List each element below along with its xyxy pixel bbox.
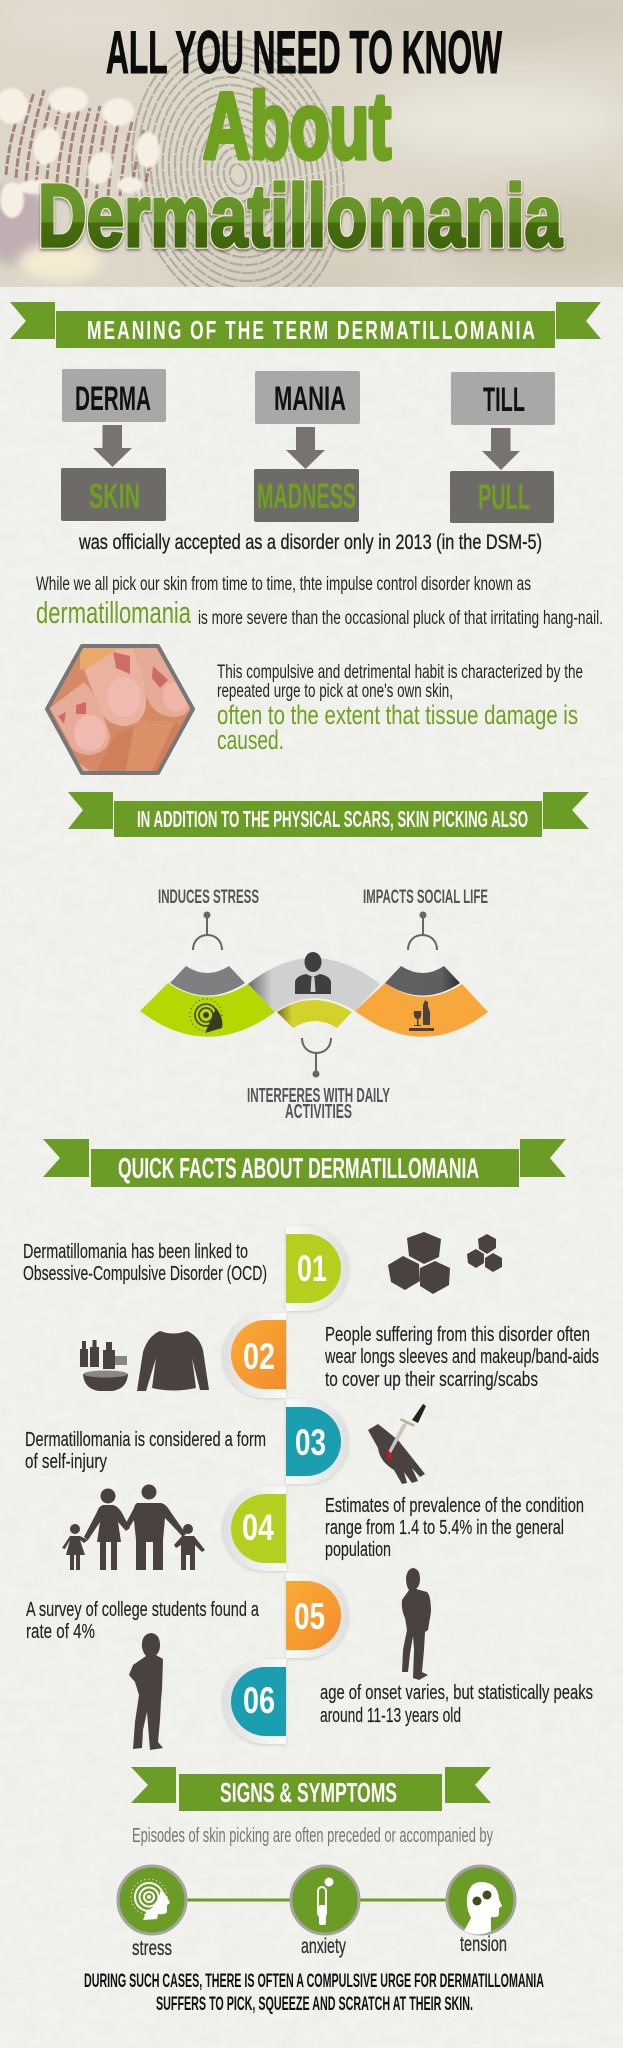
icon: tension bbox=[447, 1866, 515, 1934]
text 03 bbox=[25, 1429, 266, 1473]
arrow: till bbox=[482, 428, 520, 470]
box: madness bbox=[254, 469, 359, 522]
box: skin bbox=[61, 468, 166, 521]
label: interferes with daily activities: INTERFERES WITH DAILY bbox=[247, 1085, 390, 1107]
icon: hexagon scabs bbox=[388, 1232, 502, 1294]
fact 01 bbox=[23, 1226, 502, 1311]
segment: centre yellow bbox=[277, 1000, 352, 1028]
text: habit description: caused. bbox=[217, 725, 284, 755]
term: mania to madness bbox=[254, 371, 360, 522]
icon: standing student bbox=[402, 1568, 431, 1680]
fact 04 bbox=[62, 1484, 584, 1571]
box: pull bbox=[450, 471, 554, 523]
badge 05: 05 bbox=[294, 1596, 325, 1637]
badge 03: 03 bbox=[295, 1422, 326, 1463]
icon: family bbox=[62, 1484, 205, 1570]
banner: quick facts bbox=[43, 1139, 566, 1187]
text 06 bbox=[320, 1682, 593, 1727]
text 02: to cover up their scarring/scabs bbox=[325, 1369, 538, 1391]
label: stress: stress bbox=[132, 1937, 172, 1960]
badge 06 bbox=[223, 1659, 286, 1744]
box: pull: PULL bbox=[478, 478, 530, 517]
icon: long-sleeved sweater bbox=[137, 1331, 209, 1391]
connector: social bbox=[408, 912, 437, 950]
connector: daily activities bbox=[302, 1038, 331, 1076]
text 03: of self-injury bbox=[25, 1451, 107, 1473]
box: derma: DERMA bbox=[75, 380, 151, 418]
box: madness: MADNESS bbox=[257, 477, 356, 516]
badge 04 bbox=[223, 1486, 286, 1571]
text 02 bbox=[324, 1324, 599, 1391]
badge 04: 04 bbox=[242, 1507, 274, 1548]
icon: anxiety bbox=[291, 1866, 359, 1934]
badge 06: 06 bbox=[243, 1680, 275, 1721]
icon: stress head bbox=[190, 999, 222, 1033]
title line 2: About bbox=[203, 73, 391, 178]
header panel bbox=[0, 0, 623, 287]
right finger bbox=[135, 646, 190, 717]
text 03: Dermatillomania is considered a form bbox=[25, 1429, 266, 1451]
badge 02 bbox=[223, 1313, 286, 1398]
text: habit description bbox=[217, 662, 583, 755]
icon: bottle and glass bbox=[409, 999, 434, 1031]
symptoms row bbox=[118, 1866, 515, 1960]
segment: lime bbox=[140, 983, 275, 1037]
banner: physical scars bbox=[68, 792, 589, 837]
text 04: population bbox=[325, 1539, 391, 1561]
box: derma bbox=[62, 369, 166, 422]
text 05: rate of 4% bbox=[26, 1621, 95, 1643]
left finger bbox=[50, 682, 110, 755]
icon: stress bbox=[118, 1866, 186, 1934]
badge 01 bbox=[286, 1226, 349, 1311]
text 04 bbox=[325, 1495, 584, 1561]
badge 05 bbox=[286, 1573, 349, 1658]
label: tension: tension bbox=[460, 1933, 507, 1956]
text 01: Dermatillomania has been linked to bbox=[23, 1241, 248, 1263]
icon: knife and bleeding hand bbox=[368, 1404, 426, 1484]
term: till to pull bbox=[450, 372, 555, 523]
text: intro paragraph: dermatillomania bbox=[36, 595, 192, 630]
label: impacts social life: IMPACTS SOCIAL LIFE bbox=[363, 887, 488, 908]
label: interferes with daily activities: ACTIVITIES bbox=[285, 1101, 352, 1123]
text 05: A survey of college students found a bbox=[26, 1599, 260, 1621]
fact 02 bbox=[80, 1313, 599, 1398]
text 01 bbox=[23, 1241, 267, 1285]
text 01: Obsessive-Compulsive Disorder (OCD) bbox=[23, 1263, 267, 1285]
box: mania bbox=[255, 371, 360, 424]
text 05 bbox=[26, 1599, 260, 1643]
fact 06 bbox=[129, 1633, 593, 1750]
banner: meaning of the term bbox=[10, 302, 601, 348]
arrow: mania bbox=[286, 427, 325, 469]
segment: centre grey bbox=[248, 958, 380, 1012]
banner: signs and symptoms bbox=[131, 1767, 491, 1811]
banner: signs and symptoms: SIGNS & SYMPTOMS bbox=[220, 1777, 397, 1808]
fact 05 bbox=[26, 1568, 431, 1680]
middle finger bbox=[84, 649, 146, 726]
text: intro paragraph bbox=[36, 574, 603, 630]
box: till: TILL bbox=[483, 381, 525, 419]
term: derma to skin bbox=[61, 369, 166, 521]
box: mania: MANIA bbox=[274, 380, 346, 418]
badge 03 bbox=[286, 1399, 349, 1484]
segment: orange bbox=[355, 983, 488, 1037]
arrow: derma bbox=[93, 425, 132, 467]
box: skin: SKIN bbox=[89, 477, 140, 516]
text: closing statement bbox=[84, 1971, 544, 2015]
text: habit description: repeated urge to pick at one's own skin, bbox=[217, 681, 453, 702]
header background with fingerprint bbox=[0, 0, 623, 287]
icon: standing person bbox=[129, 1633, 163, 1750]
connector line bbox=[187, 1898, 481, 1902]
connector: stress bbox=[193, 912, 222, 950]
icon: makeup bbox=[80, 1340, 128, 1391]
badge 02: 02 bbox=[243, 1336, 275, 1377]
text 06: around 11-13 years old bbox=[320, 1705, 461, 1727]
icon: businessman bbox=[295, 952, 331, 994]
segment: right dark grey bbox=[385, 966, 460, 996]
segment: left grey bbox=[170, 966, 245, 996]
wave diagram: effects of skin picking bbox=[140, 887, 488, 1123]
badge 01: 01 bbox=[297, 1248, 327, 1289]
fact 03 bbox=[25, 1399, 426, 1484]
label: induces stress: INDUCES STRESS bbox=[158, 887, 259, 908]
label: anxiety: anxiety bbox=[301, 1935, 346, 1958]
image: picked fingers in hexagon bbox=[45, 644, 195, 775]
box: till bbox=[451, 372, 555, 425]
label: interferes with daily activities bbox=[247, 1085, 390, 1123]
